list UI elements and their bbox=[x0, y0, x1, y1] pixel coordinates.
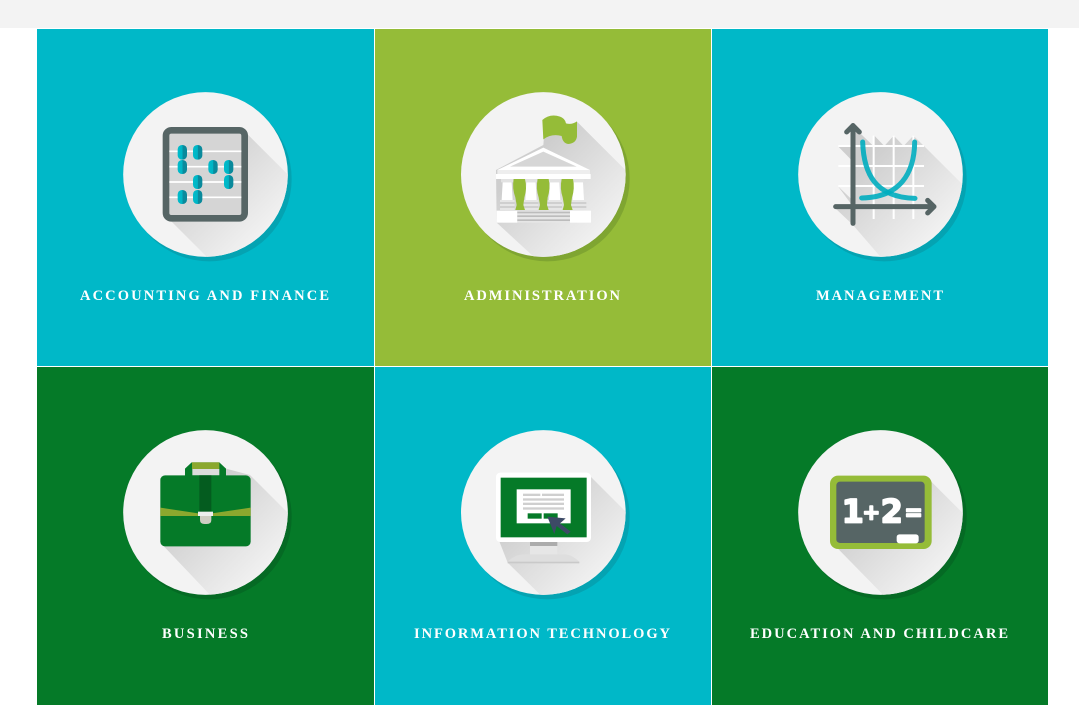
label: EDUCATION AND CHILDCARE bbox=[750, 626, 1008, 642]
panel: education and childcare bbox=[712, 367, 1048, 705]
tile background bbox=[37, 29, 374, 366]
tile background bbox=[37, 367, 374, 705]
icon: government building with flag bbox=[461, 92, 630, 262]
icon: briefcase bbox=[123, 430, 292, 600]
panel: business bbox=[37, 367, 374, 705]
icon: computer monitor bbox=[461, 430, 630, 600]
tile background bbox=[712, 367, 1048, 705]
label: MANAGEMENT bbox=[816, 288, 943, 304]
tile background bbox=[712, 29, 1048, 366]
label: ACCOUNTING AND FINANCE bbox=[80, 288, 329, 304]
tile background bbox=[375, 367, 711, 705]
label: INFORMATION TECHNOLOGY bbox=[414, 626, 671, 642]
icon: blackboard: 1 bbox=[842, 493, 864, 531]
icon: blackboard: + bbox=[862, 501, 880, 526]
icon: blackboard: 2 bbox=[881, 493, 903, 531]
panel: management bbox=[712, 29, 1048, 366]
icon: chart with curves bbox=[798, 92, 966, 262]
icon: blackboard: = bbox=[904, 501, 923, 526]
icon: abacus bbox=[123, 92, 292, 262]
label: ADMINISTRATION bbox=[464, 288, 621, 304]
panel: administration bbox=[375, 29, 711, 366]
tile background bbox=[375, 29, 711, 366]
label: BUSINESS bbox=[162, 626, 248, 642]
top bar bbox=[0, 0, 1079, 28]
panel: information technology bbox=[375, 367, 711, 705]
panel: accounting and finance bbox=[37, 29, 374, 366]
icon: blackboard bbox=[798, 430, 966, 600]
